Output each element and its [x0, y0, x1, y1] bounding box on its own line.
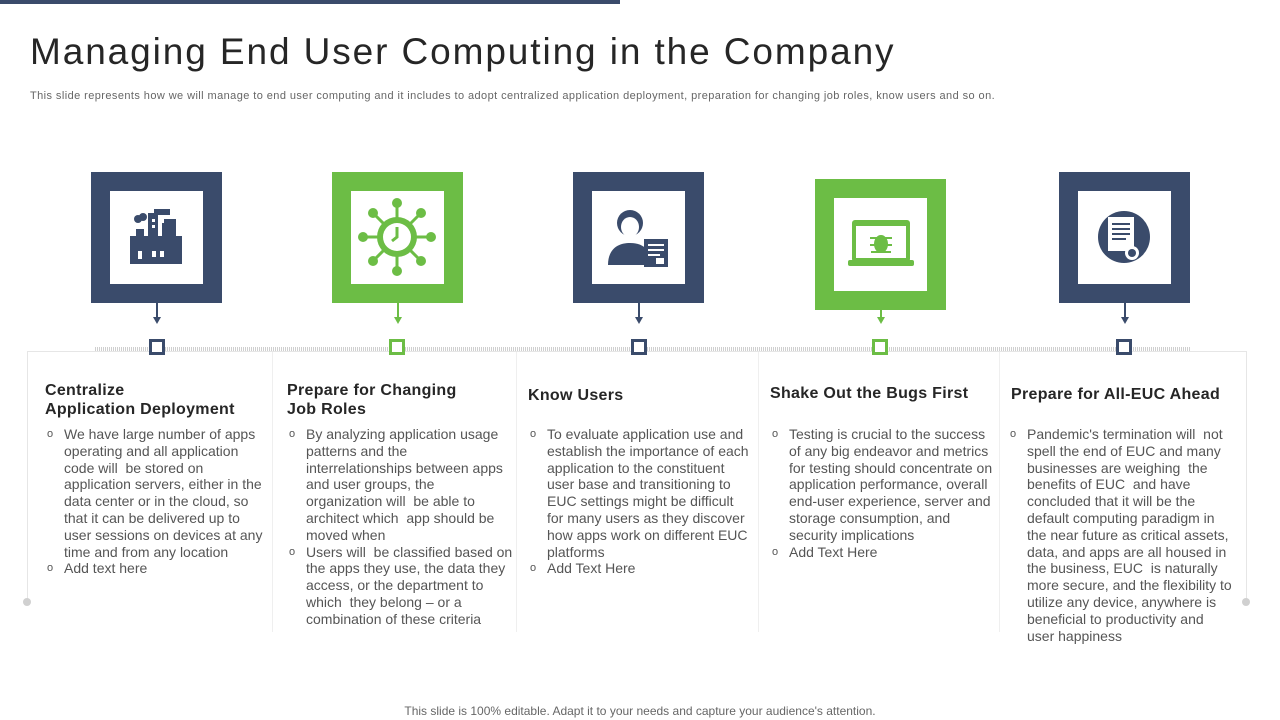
column 5 text: the near future as critical assets, — [1027, 527, 1229, 543]
column 4 text: for testing should concentrate on — [789, 460, 992, 476]
column 1 heading — [45, 382, 235, 418]
column 3 text: for many users as they discover — [547, 510, 745, 526]
column 5 text — [1010, 426, 1232, 644]
column 4 text: application performance, overall — [789, 476, 987, 492]
column 5 text: utilize any device, anywhere is — [1027, 594, 1216, 610]
column 2 text: architect which app should be — [306, 510, 494, 526]
column 1 heading: Centralize — [45, 382, 124, 399]
column 1 text: time and from any location — [64, 544, 228, 560]
column 3 text: establish the importance of each — [547, 443, 749, 459]
column 3 text: To evaluate application use and — [547, 426, 743, 442]
column 4 text: Add Text Here — [789, 544, 877, 560]
column 2 text: By analyzing application usage — [306, 426, 498, 442]
column 1 text: operating and all application — [64, 443, 238, 459]
column 2 text — [290, 426, 512, 627]
column 1 text: code will be stored on — [64, 460, 203, 476]
column 2 text: Users will be classified based on — [306, 544, 512, 560]
icon box 4: laptop bug — [815, 179, 946, 310]
top bar — [0, 0, 620, 4]
column 5 text: benefits of EUC and have — [1027, 476, 1190, 492]
column 3 text: user base and transitioning to — [547, 476, 731, 492]
column 4 text — [772, 426, 992, 560]
title: Managing End User Computing in the Company — [30, 31, 895, 72]
dotted connector line — [95, 347, 1190, 351]
column 2 text: which they belong – or a — [306, 594, 462, 610]
column 2 text: interrelationships between apps — [306, 460, 503, 476]
column 3 text: Add Text Here — [547, 560, 635, 576]
column 1 heading: Application Deployment — [45, 401, 235, 418]
column 4 text: of any big endeavor and metrics — [789, 443, 988, 459]
icon box 1: factory — [91, 172, 222, 303]
column 5 text: Pandemic's termination will not — [1027, 426, 1223, 442]
column 1 text: that it can be delivered up to — [64, 510, 240, 526]
column 4 text: Testing is crucial to the success — [789, 426, 985, 442]
column 2 text: patterns and the — [306, 443, 407, 459]
footer note: This slide is 100% editable. Adapt it to your needs and capture your audience's attention. — [404, 704, 876, 718]
column 4 text: end-user experience, server and — [789, 493, 991, 509]
column 5 text: the business, EUC is naturally — [1027, 560, 1218, 576]
column 3 text: how apps work on different EUC — [547, 527, 748, 543]
column 1 text: We have large number of apps — [64, 426, 255, 442]
column 2 heading: Prepare for Changing — [287, 382, 457, 399]
arrows and markers — [156, 302, 158, 318]
column 3 text: application to the constituent — [547, 460, 724, 476]
column 5 text: data, and apps are all housed in — [1027, 544, 1226, 560]
column 4 text: security implications — [789, 527, 914, 543]
column 1 text: user sessions on devices at any — [64, 527, 262, 543]
column 5 text: user happiness — [1027, 628, 1122, 644]
column 2 text: moved when — [306, 527, 385, 543]
column 5 text: more secure, and the flexibility to — [1027, 577, 1232, 593]
column 5 heading: Prepare for All-EUC Ahead — [1011, 386, 1220, 403]
column 2 text: combination of these criteria — [306, 611, 481, 627]
icon box 2: clock network — [332, 172, 463, 303]
icon box 5: document globe — [1059, 172, 1190, 303]
column 2 text: organization will be able to — [306, 493, 475, 509]
column 1 text: Add text here — [64, 560, 147, 576]
column 1 text: application servers, either in the — [64, 476, 262, 492]
column 1 text: data center or in the cloud, so — [64, 493, 248, 509]
column 3 text: platforms — [547, 544, 605, 560]
column 5 text: beneficial to productivity and — [1027, 611, 1204, 627]
panel: content frame — [27, 351, 1247, 603]
column 2 text: access, or the department to — [306, 577, 483, 593]
icon box 3: user with document — [573, 172, 704, 303]
column 3 heading: Know Users — [528, 387, 623, 404]
column 5 text: default computing paradigm in — [1027, 510, 1215, 526]
column 5 text: businesses are weighing the — [1027, 460, 1208, 476]
column 3 text — [530, 426, 749, 576]
column 5 text: spell the end of EUC and many — [1027, 443, 1221, 459]
column 4 heading: Shake Out the Bugs First — [770, 385, 968, 402]
column 2 text: and user groups, the — [306, 476, 434, 492]
column 2 heading: Job Roles — [287, 401, 366, 418]
column 1 text — [48, 426, 262, 576]
column 5 text: concluded that it will be the — [1027, 493, 1195, 509]
column 2 text: the apps they use, the data they — [306, 560, 505, 576]
column 2 heading — [287, 382, 457, 418]
column 3 text: EUC settings might be difficult — [547, 493, 734, 509]
column 4 text: storage consumption, and — [789, 510, 950, 526]
subtitle: This slide represents how we will manage to end user computing and it includes to adopt centralized application deployment, preparation for changing job roles, know users and so on. — [30, 90, 995, 102]
